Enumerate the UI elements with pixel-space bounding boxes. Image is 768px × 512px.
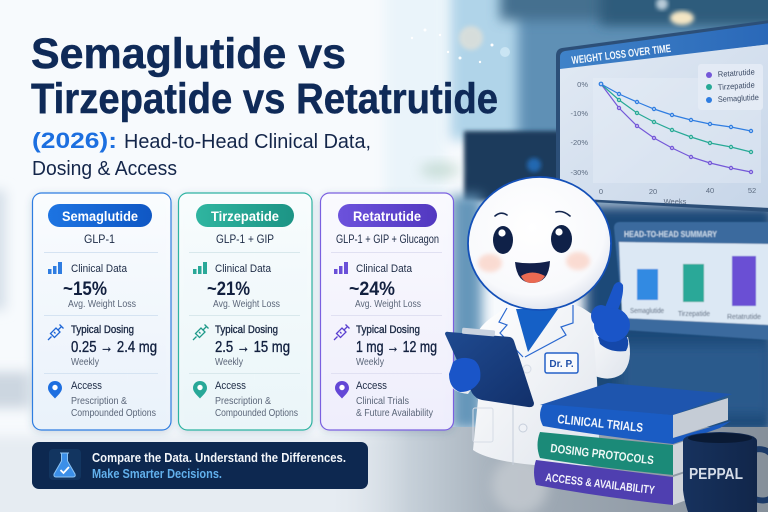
book: access & availability [534,460,700,505]
callout banner [32,442,368,489]
card: tirzepatide: 2.5 → 15 mg [215,339,290,356]
mascot head [468,177,611,310]
chart legend: Semaglutide [718,93,760,104]
mascot: Dr. P. doctor character [445,177,630,466]
card: tirzepatide: Avg. Weight Loss [213,299,280,310]
pill heading: tirzepatide: Tirzepatide [211,208,279,224]
title: Tirzepatide vs Retatrutide [31,75,498,123]
summary bar: tirzepatide [683,264,704,302]
card: retatrutide: ~24% [349,279,395,300]
x axis labels: 40 [706,186,714,195]
name badge: Dr. P. [549,359,574,370]
chart panel: head-to-head summary [614,222,768,340]
pill heading: retatrutide: Retatrutide [353,208,421,224]
card: tirzepatide [178,193,312,430]
chart legend: Tirzepatide [718,80,756,92]
mascot pointing hand [591,282,630,351]
summary bar labels: Retatrutide [727,314,761,321]
card: retatrutide: Clinical Trials [356,396,409,407]
subtitle: Dosing & Access [32,158,177,180]
book stack [534,383,732,505]
card: retatrutide: Typical Dosing [356,324,420,336]
x axis labels: 52 [748,186,756,195]
card: semaglutide: Access [71,380,102,392]
book: clinical trials: CLINICAL TRIALS [557,412,644,435]
clipboard [445,328,534,407]
icon: syringe [193,324,208,340]
book: access & availability: ACCESS & AVAILABILITY [545,472,656,497]
pill heading: tirzepatide [196,204,294,227]
card: semaglutide: Clinical Data [71,263,128,275]
pill heading: retatrutide [338,204,437,227]
coffee mug: PEPPAL [683,432,768,512]
icon: location pin [193,381,207,398]
card: retatrutide: GLP-1 + GIP + Glucagon [336,234,439,246]
subtitle: Head-to-Head Clinical Data, [124,131,371,153]
chart legend: Retatrutide [718,67,756,79]
pill heading: semaglutide: Semaglutide [62,208,138,224]
card: semaglutide: Avg. Weight Loss [68,299,136,310]
chart header band: WEIGHT LOSS OVER TIME [571,43,672,67]
chart panel: weight loss over time [556,20,768,212]
subtitle: (2026): [32,128,117,153]
summary heading: HEAD-TO-HEAD SUMMARY [624,229,717,239]
coffee mug: PEPPAL: PEPPAL [689,466,743,483]
icon: bars [334,262,348,274]
card: tirzepatide: Clinical Data [215,263,272,275]
card: semaglutide: Compounded Options [71,408,156,419]
title [31,30,498,123]
icon: bars [48,262,62,274]
line: semaglutide [599,82,753,133]
card: tirzepatide: ~21% [207,279,250,300]
y axis labels: -20% [570,138,588,147]
book: dosing protocols [538,432,700,475]
summary bar: semaglutide [637,269,658,300]
card: retatrutide: Clinical Data [356,263,413,275]
card: semaglutide: 0.25 → 2.4 mg [71,339,157,356]
card: retatrutide: Avg. Weight Loss [355,299,421,310]
book: clinical trials [540,383,732,444]
x axis labels: 20 [649,187,657,196]
summary bar labels: Semaglutide [630,308,664,315]
card: retatrutide [320,193,454,430]
chart legend [698,64,763,110]
summary bar labels: Tirzepatide [678,311,710,318]
name badge [545,353,578,373]
y axis labels: -30% [570,168,588,177]
callout banner: Compare the Data. Understand the Differences. [92,451,346,465]
card: tirzepatide: Compounded Options [215,408,298,419]
card: retatrutide: 1 mg → 12 mg [356,339,437,356]
pill heading: semaglutide [48,204,152,227]
icon: flask with check [49,449,81,480]
card: semaglutide: ~15% [63,279,107,300]
card: semaglutide: GLP-1 [84,234,115,246]
card: tirzepatide: GLP-1 + GIP [216,234,274,246]
summary bar: retatrutide [732,256,756,306]
line: retatrutide [601,84,753,174]
icon: bars [193,262,207,274]
y axis labels [570,80,588,177]
callout banner: Make Smarter Decisions. [92,467,222,481]
icon: syringe [334,324,350,340]
y axis labels: 0% [577,80,588,89]
subtitle [32,128,371,180]
lab coat [472,305,600,466]
x axis labels: 0 [599,187,603,196]
line: tirzepatide [601,84,753,154]
card: retatrutide: Weekly [356,357,384,368]
card: tirzepatide: Typical Dosing [215,324,278,336]
card: semaglutide: Typical Dosing [71,324,134,336]
summary bar labels [630,308,761,321]
card: semaglutide: Prescription & [71,396,127,407]
y axis labels: -10% [570,109,588,118]
card: retatrutide: & Future Availability [356,408,433,419]
book: dosing protocols: DOSING PROTOCOLS [550,441,655,467]
mascot left hand [449,358,480,392]
x axis labels [599,188,756,204]
mascot left arm [449,329,492,394]
title: Semaglutide vs [31,30,346,78]
card: semaglutide [32,193,171,430]
card: retatrutide: Access [356,380,387,392]
icon: syringe [48,324,64,340]
card: semaglutide: Weekly [71,357,99,368]
chart header band [560,23,768,69]
x axis labels: Weeks [664,197,687,206]
icon: location pin [48,381,62,398]
icon: location pin [335,381,349,398]
card: tirzepatide: Prescription & [215,396,271,407]
mascot right arm [580,311,630,379]
card: tirzepatide: Weekly [215,357,243,368]
card: tirzepatide: Access [215,380,246,392]
